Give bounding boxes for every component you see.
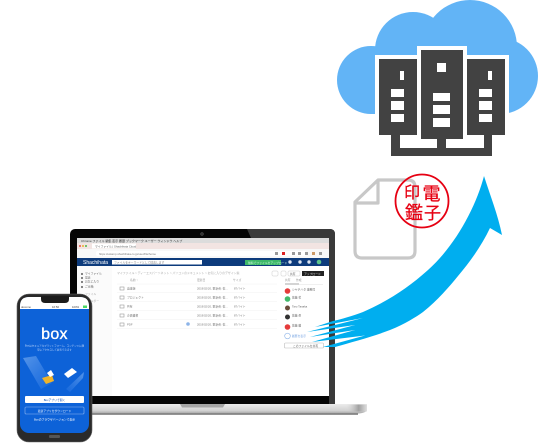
browser screen: 佐藤 花 (292, 296, 301, 300)
browser screen: 無料でファイルをアップロード (248, 261, 287, 265)
browser screen: マイファイル (85, 272, 102, 276)
browser screen: ごみ箱 (85, 284, 94, 288)
browser screen: Shachihata (83, 260, 108, 266)
browser screen: PDF (127, 322, 133, 326)
browser screen (77, 238, 329, 396)
browser screen: 作成 (296, 278, 302, 282)
laptop (50, 229, 367, 415)
browser screen: 2019/02/20, 更新者: 佐... (197, 304, 228, 308)
browser screen: 最近 (85, 276, 91, 280)
browser screen: アップロード (304, 272, 321, 276)
browser screen: 87バイト (234, 314, 246, 318)
phone intro text: 単にアクセスして共有できます (37, 348, 72, 352)
browser screen: 2019/02/20, 更新者: 佐... (197, 296, 228, 300)
browser screen: 2019/02/20, 更新者: 佐... (197, 286, 228, 290)
electronic seal stamp (396, 174, 448, 228)
browser screen: 履歴を表示 (292, 334, 306, 338)
browser screen: Chrome ファイル 編集 表示 履歴 ブックマーク ユーザー ウィンドウ ヘルプ (81, 238, 182, 243)
browser screen: 更新日 (197, 278, 206, 282)
browser screen: 2019/02/20, 更新者: 佐... (197, 314, 228, 318)
browser screen: 佐藤 蘭 (292, 324, 301, 328)
phone buttons (25, 396, 84, 422)
box logo: box (41, 326, 68, 343)
icon: servers (375, 46, 509, 160)
phone screen: 16:50 (52, 305, 59, 309)
browser screen: お気に入り (85, 280, 99, 284)
phone speaker (49, 435, 60, 438)
browser screen: フォルダー (85, 299, 99, 303)
browser screen: サイズ (233, 278, 242, 282)
phone intro text (25, 344, 85, 352)
phone screen: docomo (21, 305, 31, 309)
browser screen: 87バイト (234, 296, 246, 300)
browser screen: Taro Tanaka (292, 304, 308, 308)
phone buttons: Boxアプリで開く (44, 398, 65, 402)
browser screen: 87バイト (234, 322, 246, 326)
browser screen: 2019/02/20, 更新者: 佐... (197, 322, 228, 326)
browser screen: 共有 (290, 272, 296, 276)
browser screen: マイファイル > ディーエスパーソネット > パソコンのドキュメント > お気に入りのデザイン案 (117, 270, 240, 275)
phone buttons: Boxのブラウザバージョンで表示 (34, 418, 75, 422)
browser screen: 議事録 (127, 286, 136, 290)
browser screen: 企画書類 (127, 314, 138, 318)
cloud (337, 0, 538, 114)
browser screen: プロジェクト (127, 296, 144, 300)
phone body (17, 294, 92, 442)
electronic seal stamp: 印 (404, 184, 420, 202)
phone intro text: Boxはセキュアなプラットフォーム、コンテンツに簡 (25, 344, 85, 348)
browser screen: 87バイト (234, 286, 246, 290)
phone screen: 100% (72, 305, 80, 309)
arrow (307, 176, 502, 347)
electronic seal stamp: 子 (424, 204, 441, 223)
browser screen: ファイルをキーワードとして検索します (114, 260, 164, 264)
laptop base (50, 404, 367, 415)
electronic seal stamp: 電 (422, 184, 440, 204)
phone screen (20, 296, 89, 433)
browser screen: シヤチハタ 事務局 (292, 288, 315, 292)
browser screen: 共有 (285, 278, 291, 282)
browser screen: https://estamp.shachihata.co.jp/user/file/home (99, 252, 156, 256)
browser screen: 87バイト (234, 304, 246, 308)
phone (17, 294, 92, 442)
electronic seal stamp: 鑑 (405, 203, 423, 223)
phone buttons: 最新アプリをダウンロード (38, 409, 71, 413)
browser screen: 佐藤 勇 (292, 314, 301, 318)
browser screen: ファイル (85, 292, 96, 296)
browser screen: 名前 ↑ (130, 278, 138, 282)
phone illustration (23, 356, 84, 392)
laptop bezel (70, 229, 335, 404)
icon: document (355, 180, 415, 258)
browser screen: 共有 (127, 304, 133, 308)
browser screen: マイファイル | Shachihata Cloud (95, 244, 137, 248)
browser screen: このファイルを共有 (293, 344, 318, 348)
